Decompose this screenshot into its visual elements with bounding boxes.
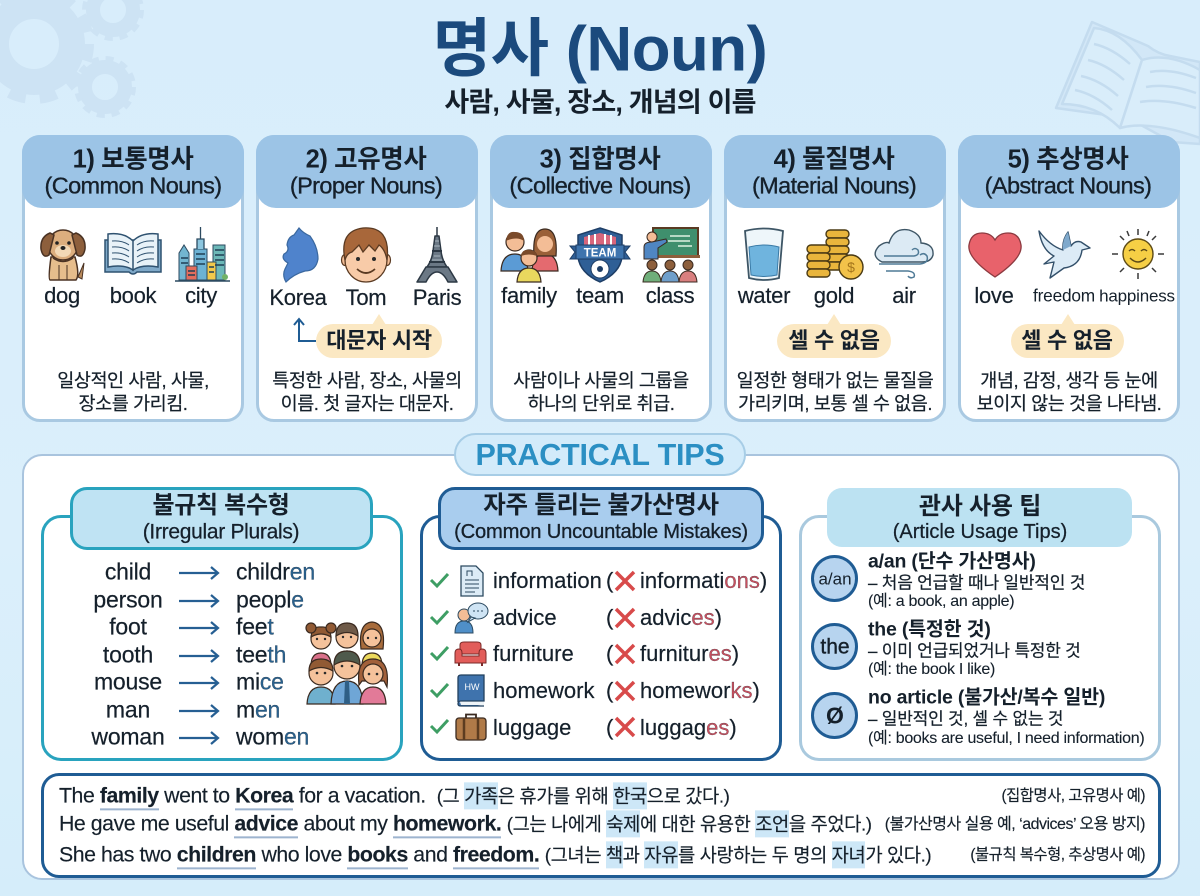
subheading: material nouns: (Material Nouns) bbox=[752, 172, 916, 198]
subheading text: article tips: (Article Usage Tips) bbox=[893, 521, 1067, 543]
example sentence 1: The family went to Korea for a vacation. (그 가족은 휴가를 위해 한국으로 갔다.) bbox=[59, 783, 729, 807]
icon: boy face bbox=[340, 227, 392, 283]
plural list: people bbox=[236, 586, 304, 612]
description: material nouns: 가리키며, 보통 셀 수 없음. bbox=[738, 393, 932, 414]
note 1: (집합명사, 고유명사 예) bbox=[1001, 787, 1145, 804]
uncountable list: informations) bbox=[640, 568, 767, 593]
uncountable list: luggages) bbox=[640, 715, 737, 740]
background decoration: gears bbox=[0, 0, 144, 118]
icon: heart bbox=[968, 232, 1022, 278]
uncountable list: ( bbox=[606, 568, 613, 593]
callout: capital start: 대문자 시작 bbox=[326, 328, 432, 353]
badge: a/an bbox=[811, 555, 858, 602]
uncountable list: homework bbox=[493, 678, 594, 703]
subheading: common nouns: (Common Nouns) bbox=[44, 172, 222, 198]
plural list: person bbox=[93, 586, 163, 612]
icon: Eiffel tower bbox=[416, 227, 458, 283]
icon: dove bbox=[1038, 230, 1091, 279]
icon: book bbox=[104, 232, 162, 275]
uncountable list: information bbox=[493, 568, 602, 593]
panel: example sentences bbox=[41, 773, 1161, 878]
label: air: air bbox=[892, 283, 916, 308]
label: family: family bbox=[501, 283, 557, 308]
description: material nouns bbox=[737, 370, 933, 414]
uncountable list: furniture bbox=[493, 641, 574, 666]
heading: proper nouns: 2) 고유명사 bbox=[306, 145, 426, 173]
plural list: mice bbox=[236, 668, 284, 694]
heading: practical tips: PRACTICAL TIPS bbox=[475, 438, 725, 472]
background decoration: open book bbox=[1054, 21, 1200, 146]
uncountable list: homeworks) bbox=[640, 678, 760, 703]
label: love: love bbox=[974, 283, 1014, 308]
icon: water glass bbox=[744, 228, 784, 281]
description: proper nouns: 특정한 사람, 장소, 사물의 bbox=[272, 370, 462, 391]
panel: collective nouns bbox=[490, 135, 712, 422]
badge: the bbox=[811, 623, 858, 670]
description: collective nouns: 사람이나 사물의 그룹을 bbox=[513, 370, 689, 391]
icon: sun bbox=[1112, 229, 1164, 279]
label: team: team bbox=[576, 283, 624, 308]
subheading text: irregular plurals: (Irregular Plurals) bbox=[143, 520, 299, 544]
badge: no article bbox=[811, 692, 858, 739]
heading: practical tips bbox=[454, 433, 746, 476]
tip: the: (예: the book I like) bbox=[868, 661, 995, 678]
tip: the bbox=[868, 618, 1081, 678]
plural list: mouse bbox=[94, 668, 162, 694]
description: abstract nouns: 보이지 않는 것을 나타냄. bbox=[977, 393, 1161, 414]
icon: gold coins: $ bbox=[847, 259, 855, 275]
panel: article tips bbox=[799, 515, 1161, 761]
uncountable list: furnitures) bbox=[640, 641, 739, 666]
icon: homework book bbox=[457, 674, 485, 707]
subheading: collective nouns: (Collective Nouns) bbox=[509, 172, 691, 198]
panel: uncountable mistakes bbox=[420, 515, 782, 761]
title: 명사 (Noun) bbox=[433, 14, 767, 84]
subtitle: 사람, 사물, 장소, 개념의 이름 bbox=[444, 88, 756, 118]
callout: capital start bbox=[316, 324, 442, 358]
icon: sofa bbox=[454, 642, 486, 666]
badge: a/an: a/an bbox=[818, 570, 852, 588]
icon: Korea map bbox=[282, 227, 319, 283]
label: city: city bbox=[185, 283, 217, 308]
panel: material nouns bbox=[724, 135, 946, 422]
note 3: (불규칙 복수형, 추상명사 예) bbox=[970, 846, 1145, 863]
plural list: woman bbox=[91, 724, 165, 750]
tip: no article bbox=[868, 686, 1144, 747]
plural list: man bbox=[106, 696, 150, 722]
callout: uncountable abstract: 셀 수 없음 bbox=[1021, 328, 1113, 353]
heading: material nouns: 4) 물질명사 bbox=[774, 145, 894, 173]
heading: common nouns: 1) 보통명사 bbox=[73, 145, 193, 173]
description: collective nouns: 하나의 단위로 취급. bbox=[528, 393, 674, 414]
tip: the: – 이미 언급되었거나 특정한 것 bbox=[868, 642, 1081, 660]
panel: practical tips bbox=[22, 454, 1180, 880]
tip: a/an: – 처음 언급할 때나 일반적인 것 bbox=[868, 574, 1085, 592]
tip: no article: – 일반적인 것, 셀 수 없는 것 bbox=[868, 710, 1063, 728]
badge: no article: Ø bbox=[826, 702, 844, 728]
uncountable list: advices) bbox=[640, 605, 722, 630]
description: common nouns: 장소를 가리킴. bbox=[78, 393, 187, 414]
tip: no article: no article (불가산/복수 일반) bbox=[868, 686, 1105, 708]
plural list: men bbox=[236, 696, 280, 722]
arrow: capital letter pointer bbox=[293, 318, 316, 342]
description: collective nouns bbox=[513, 370, 689, 414]
plural list: children bbox=[236, 558, 315, 584]
icon: luggage bbox=[455, 714, 487, 741]
badge: the: the bbox=[820, 636, 850, 658]
tip: a/an: (예: a book, an apple) bbox=[868, 593, 1014, 610]
icon: group of people bbox=[305, 621, 388, 705]
uncountable list: ( bbox=[606, 678, 613, 703]
description: material nouns: 일정한 형태가 없는 물질을 bbox=[737, 370, 933, 391]
description: common nouns bbox=[57, 370, 209, 414]
subheading: abstract nouns: (Abstract Nouns) bbox=[985, 172, 1151, 198]
plural list bbox=[91, 558, 315, 750]
icon: homework book: HW bbox=[464, 682, 480, 692]
plural list: feet bbox=[236, 614, 274, 640]
label: Paris: Paris bbox=[413, 285, 461, 310]
icon: air cloud bbox=[874, 228, 934, 279]
label: water: water bbox=[738, 283, 790, 308]
plural list: teeth bbox=[236, 642, 286, 668]
icon: dog bbox=[40, 229, 86, 281]
example sentence 3: She has two children who love books and freedom. (그녀는 책과 자유를 사랑하는 두 명의 자녀가 있다.) bbox=[59, 842, 931, 866]
panel: abstract nouns bbox=[958, 135, 1180, 422]
icon: document bbox=[460, 565, 484, 597]
heading text: uncountable mistakes: 자주 틀리는 불가산명사 bbox=[483, 492, 719, 519]
tip: the: the (특정한 것) bbox=[868, 618, 991, 640]
icon: family bbox=[500, 228, 559, 283]
description: abstract nouns bbox=[977, 370, 1161, 414]
plural list: foot bbox=[109, 614, 147, 640]
note 2: (불가산명사 실용 예, ‘advices’ 오용 방지) bbox=[885, 816, 1145, 833]
tip: a/an: a/an (단수 가산명사) bbox=[868, 550, 1036, 572]
uncountable list: luggage bbox=[493, 715, 571, 740]
label: freedom: freedom bbox=[1033, 285, 1095, 305]
callout: uncountable material bbox=[777, 324, 891, 358]
plural list: tooth bbox=[103, 642, 153, 668]
subheading text: uncountable mistakes: (Common Uncountable Mistakes) bbox=[454, 521, 748, 543]
heading: abstract nouns: 5) 추상명사 bbox=[1008, 145, 1128, 173]
uncountable list: ( bbox=[606, 605, 613, 630]
callout: uncountable material: 셀 수 없음 bbox=[788, 328, 880, 353]
uncountable list bbox=[430, 565, 767, 741]
icon: gold coins bbox=[806, 229, 864, 280]
panel: irregular plurals bbox=[41, 515, 403, 761]
subheading: proper nouns: (Proper Nouns) bbox=[290, 172, 442, 198]
heading: collective nouns: 3) 집합명사 bbox=[540, 145, 660, 173]
callout: uncountable abstract bbox=[1011, 324, 1124, 358]
icon: classroom bbox=[642, 227, 700, 282]
panel: proper nouns bbox=[256, 135, 478, 422]
description: proper nouns bbox=[272, 370, 462, 414]
uncountable list: ( bbox=[606, 641, 613, 666]
heading: uncountable mistakes bbox=[438, 487, 764, 550]
example sentence 2: He gave me useful advice about my homework. (그는 나에게 숙제에 대한 유용한 조언을 주었다.) bbox=[59, 811, 872, 835]
description: abstract nouns: 개념, 감정, 생각 등 눈에 bbox=[980, 370, 1158, 391]
icon: advice bbox=[454, 602, 488, 634]
description: common nouns: 일상적인 사람, 사물, bbox=[57, 370, 209, 391]
label: Korea: Korea bbox=[269, 285, 327, 310]
heading text: irregular plurals: 불규칙 복수형 bbox=[152, 492, 290, 519]
plural list: child bbox=[105, 558, 151, 584]
label: Tom: Tom bbox=[346, 285, 386, 310]
description: proper nouns: 이름. 첫 글자는 대문자. bbox=[281, 393, 453, 414]
panel: common nouns bbox=[22, 135, 244, 422]
heading: article tips bbox=[827, 488, 1132, 547]
icon: city bbox=[175, 227, 230, 282]
icon: team shield bbox=[569, 227, 631, 283]
tip: a/an bbox=[868, 550, 1085, 610]
label: book: book bbox=[110, 283, 156, 308]
heading: irregular plurals bbox=[70, 487, 373, 550]
label: dog: dog bbox=[44, 283, 80, 308]
heading text: article tips: 관사 사용 팁 bbox=[919, 493, 1041, 520]
label: happiness: happiness bbox=[1099, 286, 1175, 306]
icon: team shield: TEAM bbox=[584, 248, 616, 260]
uncountable list: advice bbox=[493, 605, 557, 630]
label: class: class bbox=[646, 283, 694, 308]
label: gold: gold bbox=[814, 283, 854, 308]
uncountable list: ( bbox=[606, 715, 613, 740]
plural list: women bbox=[236, 724, 309, 750]
tip: no article: (예: books are useful, I need information) bbox=[868, 730, 1144, 747]
